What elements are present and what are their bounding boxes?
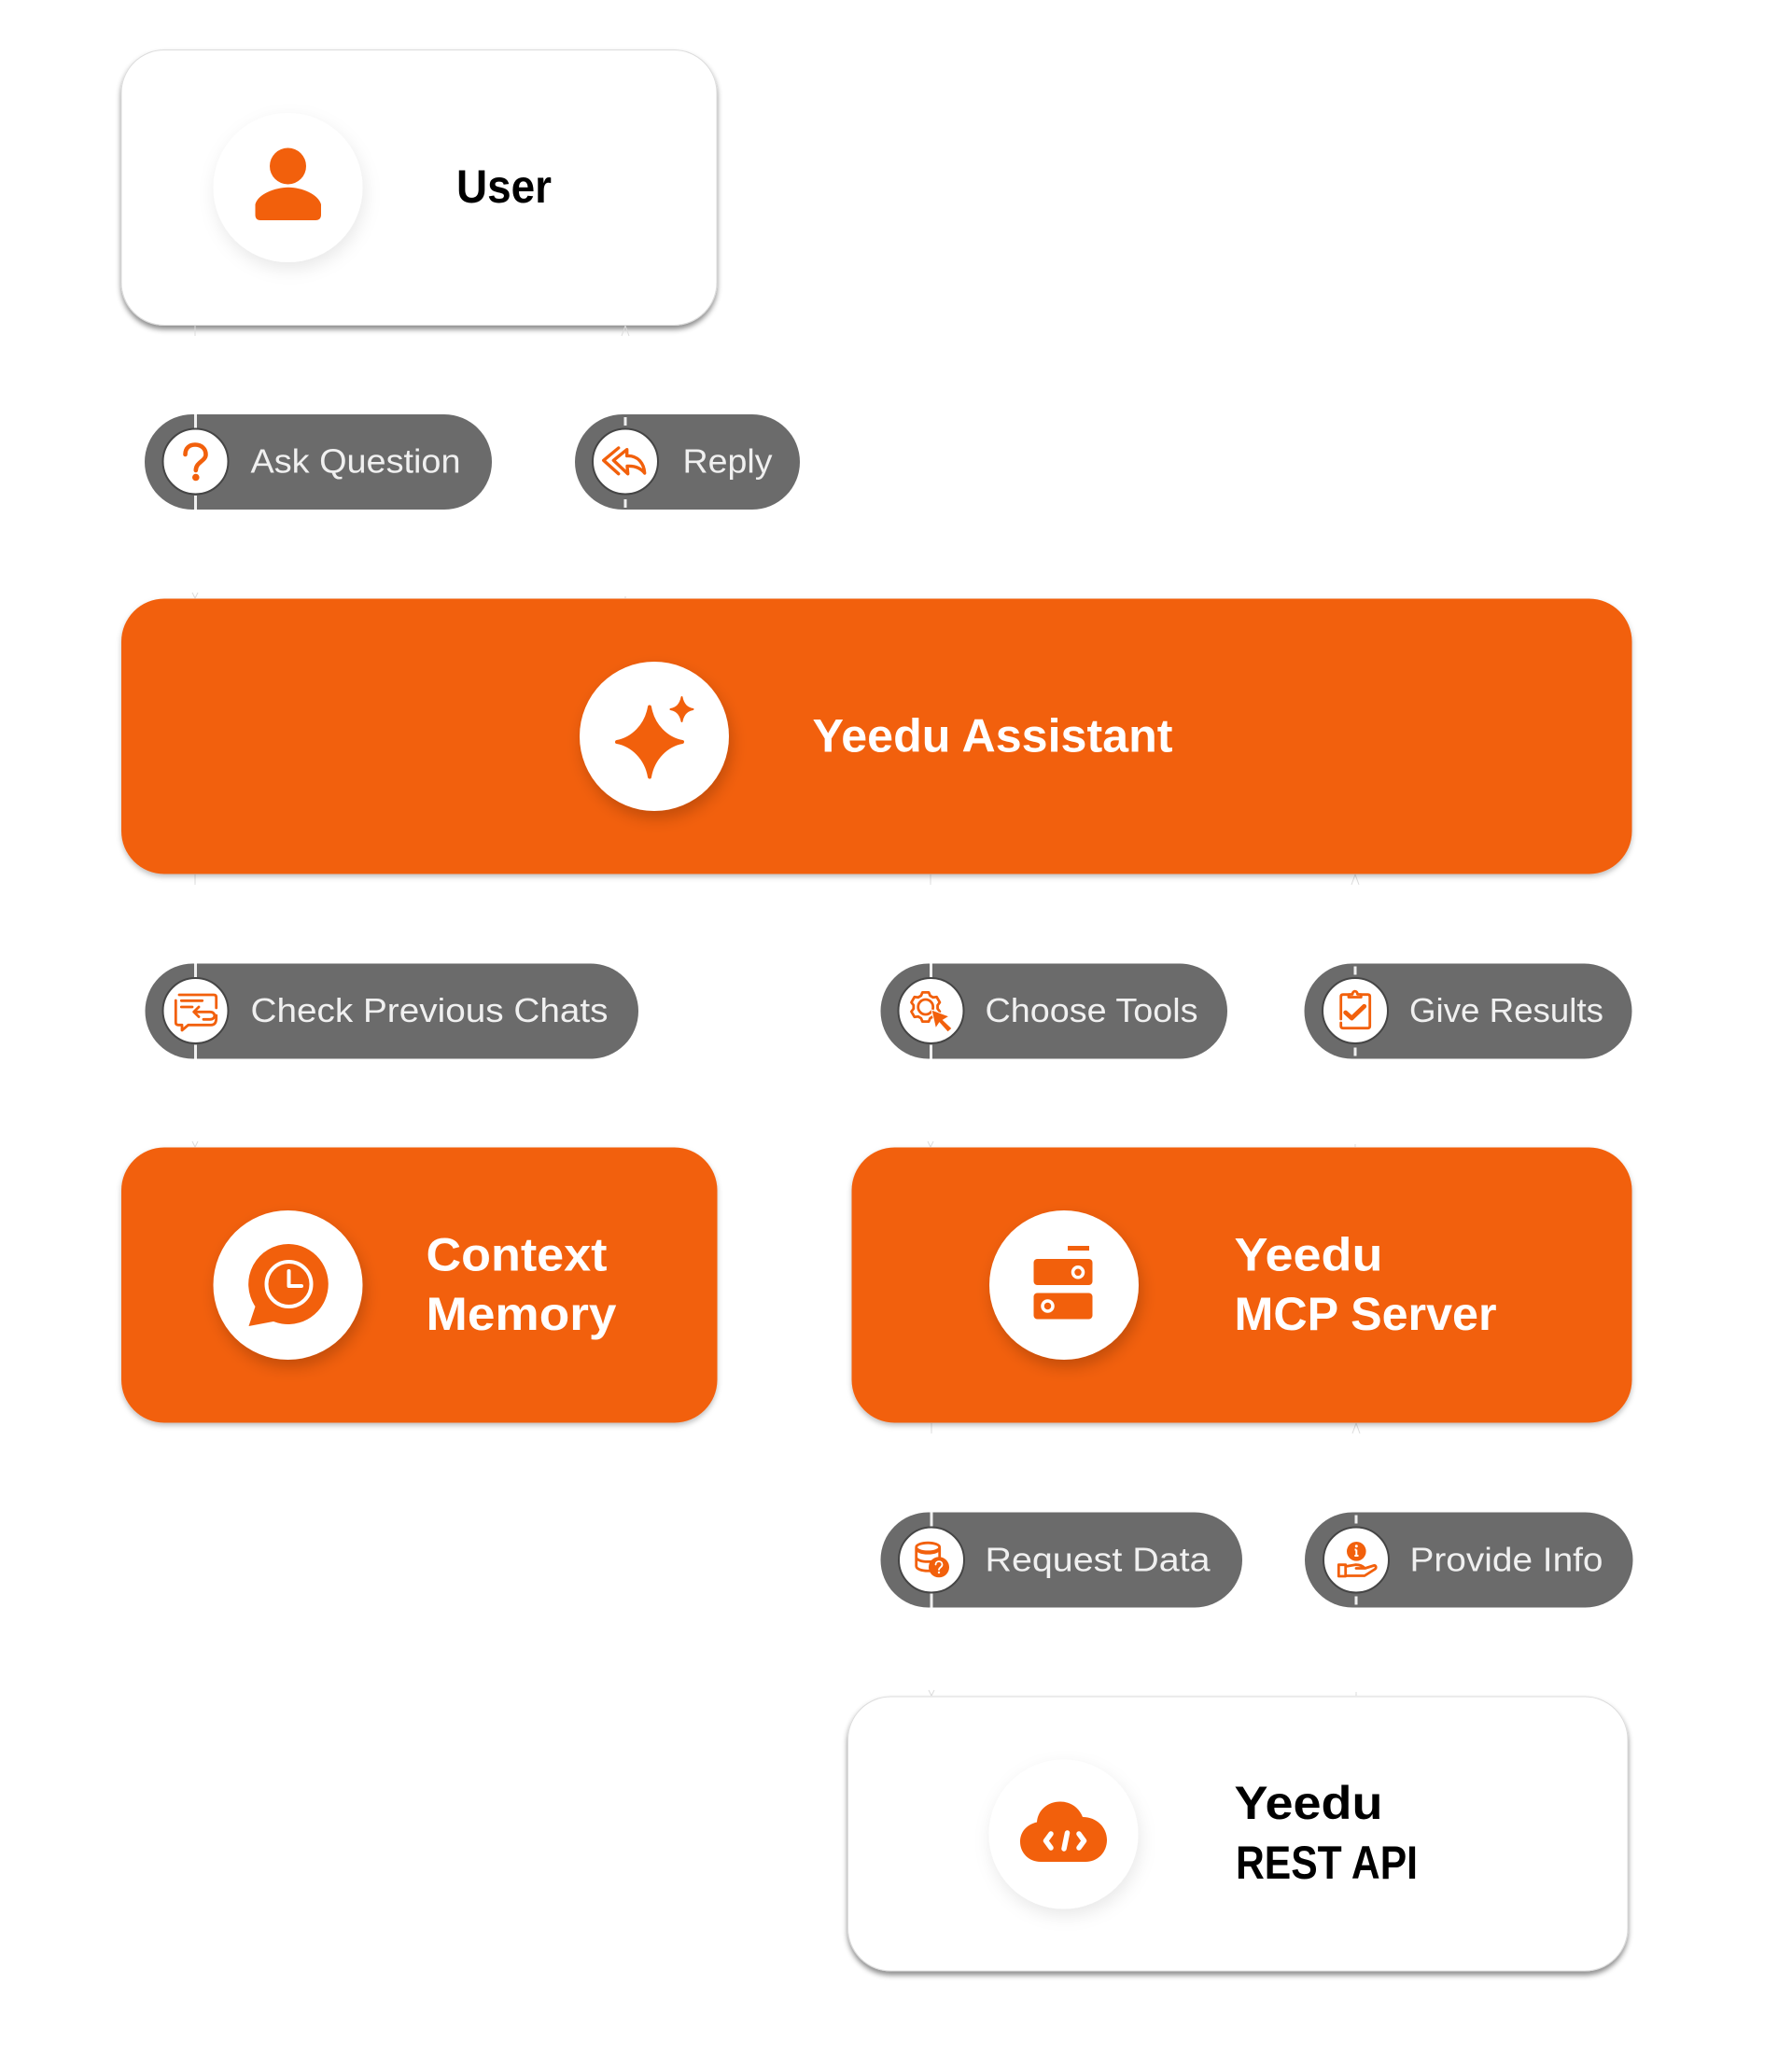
label: Provide Info: Provide Info — [1409, 1540, 1603, 1579]
heading: Context Memory — [426, 1228, 617, 1340]
label: Reply: Reply — [683, 442, 773, 480]
pill: Reply — [575, 414, 800, 510]
heading: Context Memory: Context — [426, 1228, 608, 1280]
icon: server — [989, 1210, 1139, 1360]
icon: user — [213, 113, 362, 262]
label: Request Data: Request Data — [986, 1540, 1211, 1579]
connector stubs — [192, 326, 1360, 1696]
pill: Choose Tools — [881, 963, 1227, 1058]
icon: chat clock — [213, 1210, 362, 1360]
icon: code cloud — [989, 1760, 1139, 1909]
heading: Yeedu REST API: REST API — [1236, 1837, 1418, 1889]
pill: Provide Info — [1305, 1512, 1633, 1607]
pill: Ask Question — [145, 414, 492, 510]
icon: double reply arrow — [604, 448, 645, 474]
pill: Check Previous Chats — [146, 963, 638, 1058]
pill: Request Data — [881, 1512, 1242, 1607]
panel: User — [121, 50, 717, 325]
heading: Context Memory: Memory — [426, 1288, 617, 1340]
panel: Yeedu Assistant — [121, 599, 1631, 874]
heading: Yeedu MCP Server: Yeedu — [1234, 1228, 1383, 1280]
label: Choose Tools: Choose Tools — [986, 991, 1198, 1029]
icon: database question — [917, 1543, 949, 1577]
icon: hand with info — [1338, 1542, 1376, 1576]
icon: clipboard check — [1341, 991, 1370, 1028]
heading: Yeedu MCP Server: MCP Server — [1234, 1288, 1497, 1340]
panel: Context Memory — [121, 1148, 717, 1422]
panel: Yeedu MCP Server — [851, 1148, 1631, 1422]
label: Give Results: Give Results — [1409, 991, 1603, 1029]
pill: Give Results — [1305, 963, 1631, 1058]
icon: sparkles — [580, 662, 729, 811]
heading: Yeedu REST API — [1234, 1777, 1418, 1889]
icon: chat history — [175, 995, 217, 1030]
heading: Yeedu MCP Server — [1234, 1228, 1497, 1340]
panel: Yeedu REST API — [847, 1697, 1628, 1971]
icon: gear with cursor — [911, 992, 952, 1032]
icon: question mark — [185, 444, 205, 481]
label: Ask Question: Ask Question — [250, 442, 461, 480]
heading: Yeedu REST API: Yeedu — [1234, 1777, 1383, 1829]
heading: Yeedu Assistant: Yeedu Assistant — [812, 709, 1173, 762]
label: Check Previous Chats: Check Previous Chats — [250, 991, 609, 1029]
heading: User: User — [456, 161, 552, 213]
